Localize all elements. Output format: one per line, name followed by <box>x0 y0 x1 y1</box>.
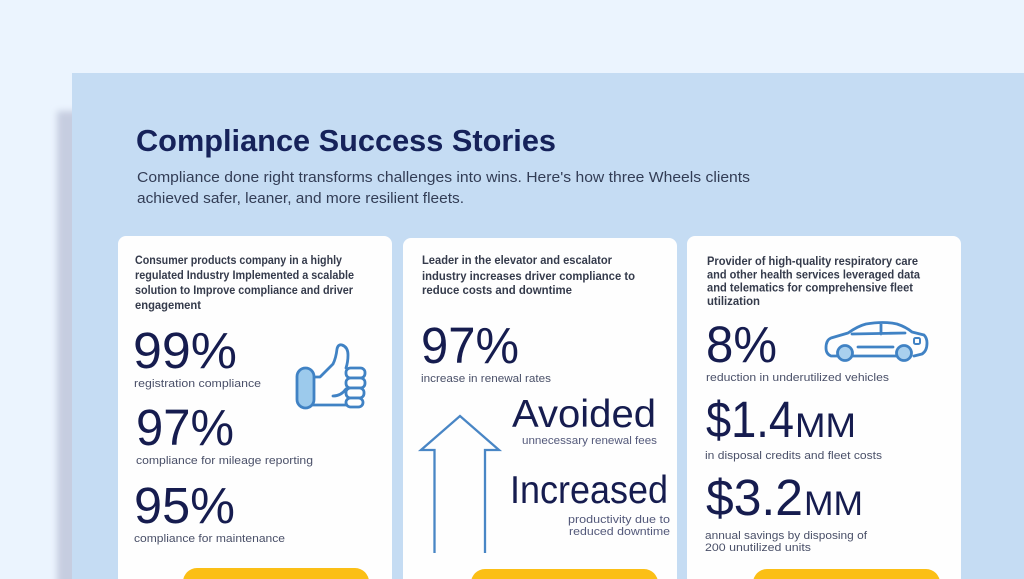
card 1 background <box>118 236 392 579</box>
title: Compliance Success Stories <box>136 123 556 158</box>
card 3 description: and telematics for comprehensive fleet <box>707 282 913 294</box>
icon: car <box>826 322 927 360</box>
card 3 description: utilization <box>707 296 760 308</box>
stat: 99%: registration compliance <box>134 378 261 390</box>
stat: $3.2MM: annual savings by disposing of <box>705 530 868 542</box>
stat: $3.2MM: $3.2 <box>706 469 803 526</box>
card 1 description: regulated Industry Implemented a scalable <box>135 270 354 282</box>
stat: 8%: 8% <box>706 316 777 373</box>
stat: 95%: 95% <box>134 477 235 534</box>
card 2 description <box>422 255 635 297</box>
stat: $1.4MM: in disposal credits and fleet costs <box>705 450 883 462</box>
card 3 description: and other health services leveraged data <box>707 270 921 282</box>
card 3 description: Provider of high-quality respiratory care <box>707 256 918 268</box>
icon: thumbs up <box>297 345 365 408</box>
stat: 95%: compliance for maintenance <box>134 533 285 545</box>
stat: increased <box>510 469 670 538</box>
stat: $1.4MM <box>705 391 883 462</box>
stat: 97% mileage: 97% <box>136 399 234 456</box>
stat: increased: Increased <box>510 469 668 512</box>
card 1 description: solution to Improve compliance and driver <box>135 285 353 297</box>
panel: card 3 respiratory care <box>687 236 961 579</box>
panel: card 1 consumer products <box>118 236 392 579</box>
stat: 95% <box>134 477 285 545</box>
button 1 <box>183 568 369 579</box>
intro text: achieved safer, leaner, and more resilient fleets. <box>137 190 464 207</box>
button 3 <box>753 569 940 579</box>
card 1 description <box>135 255 354 312</box>
card 2 description: Leader in the elevator and escalator <box>422 255 613 267</box>
stat: $3.2MM <box>705 469 868 554</box>
stat: 97% renewal: increase in renewal rates <box>421 373 552 385</box>
button 2 <box>471 569 658 579</box>
stat: 97% mileage <box>136 399 313 467</box>
stat: 99% <box>133 322 261 390</box>
card 1 description: Consumer products company in a highly <box>135 255 343 267</box>
intro text: Compliance done right transforms challenges into wins. Here's how three Wheels clients <box>137 169 750 186</box>
card 3 description <box>707 256 921 308</box>
stat: 97% renewal: 97% <box>421 317 519 374</box>
panel shadow <box>57 111 87 579</box>
card 2 background <box>403 238 677 579</box>
icon: up arrow <box>421 416 499 553</box>
stat: 8% <box>706 316 890 384</box>
stat: increased: productivity due to <box>568 514 670 526</box>
stat: 97% mileage: compliance for mileage reporting <box>136 455 313 467</box>
stat: avoided: Avoided <box>512 393 656 436</box>
stat: $1.4MM: $1.4 <box>706 391 794 448</box>
stat: $3.2MM: 200 unutilized units <box>705 542 812 554</box>
card 3 background <box>687 236 961 579</box>
card 2 description: reduce costs and downtime <box>422 285 572 297</box>
stat: 99%: 99% <box>133 322 237 379</box>
stat: increased: reduced downtime <box>569 526 670 538</box>
card 2 description: industry increases driver compliance to <box>422 271 635 283</box>
card 1 description: engagement <box>135 300 201 312</box>
panel: card 2 elevator leader <box>403 238 677 579</box>
stat: 8%: reduction in underutilized vehicles <box>706 372 890 384</box>
stat: $3.2MM: MM <box>804 485 863 523</box>
stat: avoided: unnecessary renewal fees <box>522 435 658 447</box>
intro text <box>137 169 750 207</box>
stat: 97% renewal <box>421 317 552 385</box>
stat: $1.4MM: MM <box>795 407 856 445</box>
